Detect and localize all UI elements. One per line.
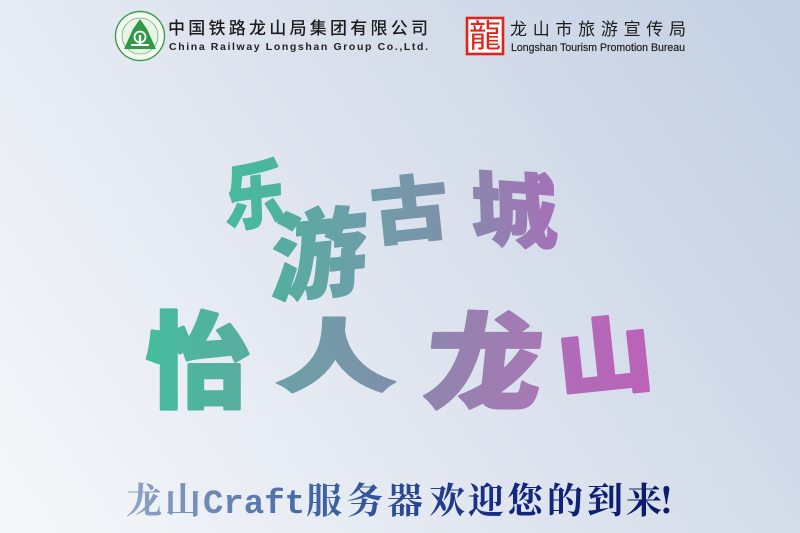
title line 2: 怡人龙山: 山 <box>550 286 658 416</box>
welcome line: 服 <box>306 473 342 524</box>
title line 2: 怡人龙山: 怡 <box>146 278 250 429</box>
bureau name English: Longshan Tourism Promotion Bureau <box>511 42 685 54</box>
welcome line: 迎 <box>468 473 504 524</box>
title line 1: 乐游古城: 古 <box>365 149 454 261</box>
welcome line: 龙 <box>126 473 162 524</box>
bureau name Chinese: 龙山市旅游宣传局 <box>510 15 686 40</box>
welcome line: 的 <box>547 473 583 524</box>
title line 2: 怡人龙山 <box>146 278 658 430</box>
welcome line: ! <box>660 473 673 524</box>
logo: China Railway Longshan Group <box>116 12 428 60</box>
welcome line: 务 <box>347 473 383 524</box>
title line 1: 乐游古城: 城 <box>469 145 559 267</box>
welcome line: 欢 <box>429 473 465 524</box>
title line 1: 乐游古城: 乐 <box>223 135 286 248</box>
title line 1: 乐游古城 <box>223 135 559 323</box>
company name Chinese: 中国铁路龙山局集团有限公司 <box>168 14 428 39</box>
company name English: China Railway Longshan Group Co.,Ltd. <box>169 41 428 53</box>
welcome line: 器 <box>387 473 423 524</box>
welcome line: 山 <box>165 473 201 524</box>
title line 2: 怡人龙山: 人 <box>275 294 397 408</box>
icon: railway round emblem <box>116 12 164 60</box>
logo: Longshan Tourism Promotion Bureau <box>467 11 686 57</box>
icon: red dragon seal: 龍 <box>469 11 501 57</box>
welcome line: 您 <box>507 473 545 524</box>
title line 2: 怡人龙山: 龙 <box>419 280 551 430</box>
title line 1: 乐游古城: 游 <box>269 172 369 323</box>
welcome line: 来 <box>626 473 662 524</box>
welcome line: 到 <box>587 473 623 524</box>
welcome line: Craft <box>203 486 305 524</box>
